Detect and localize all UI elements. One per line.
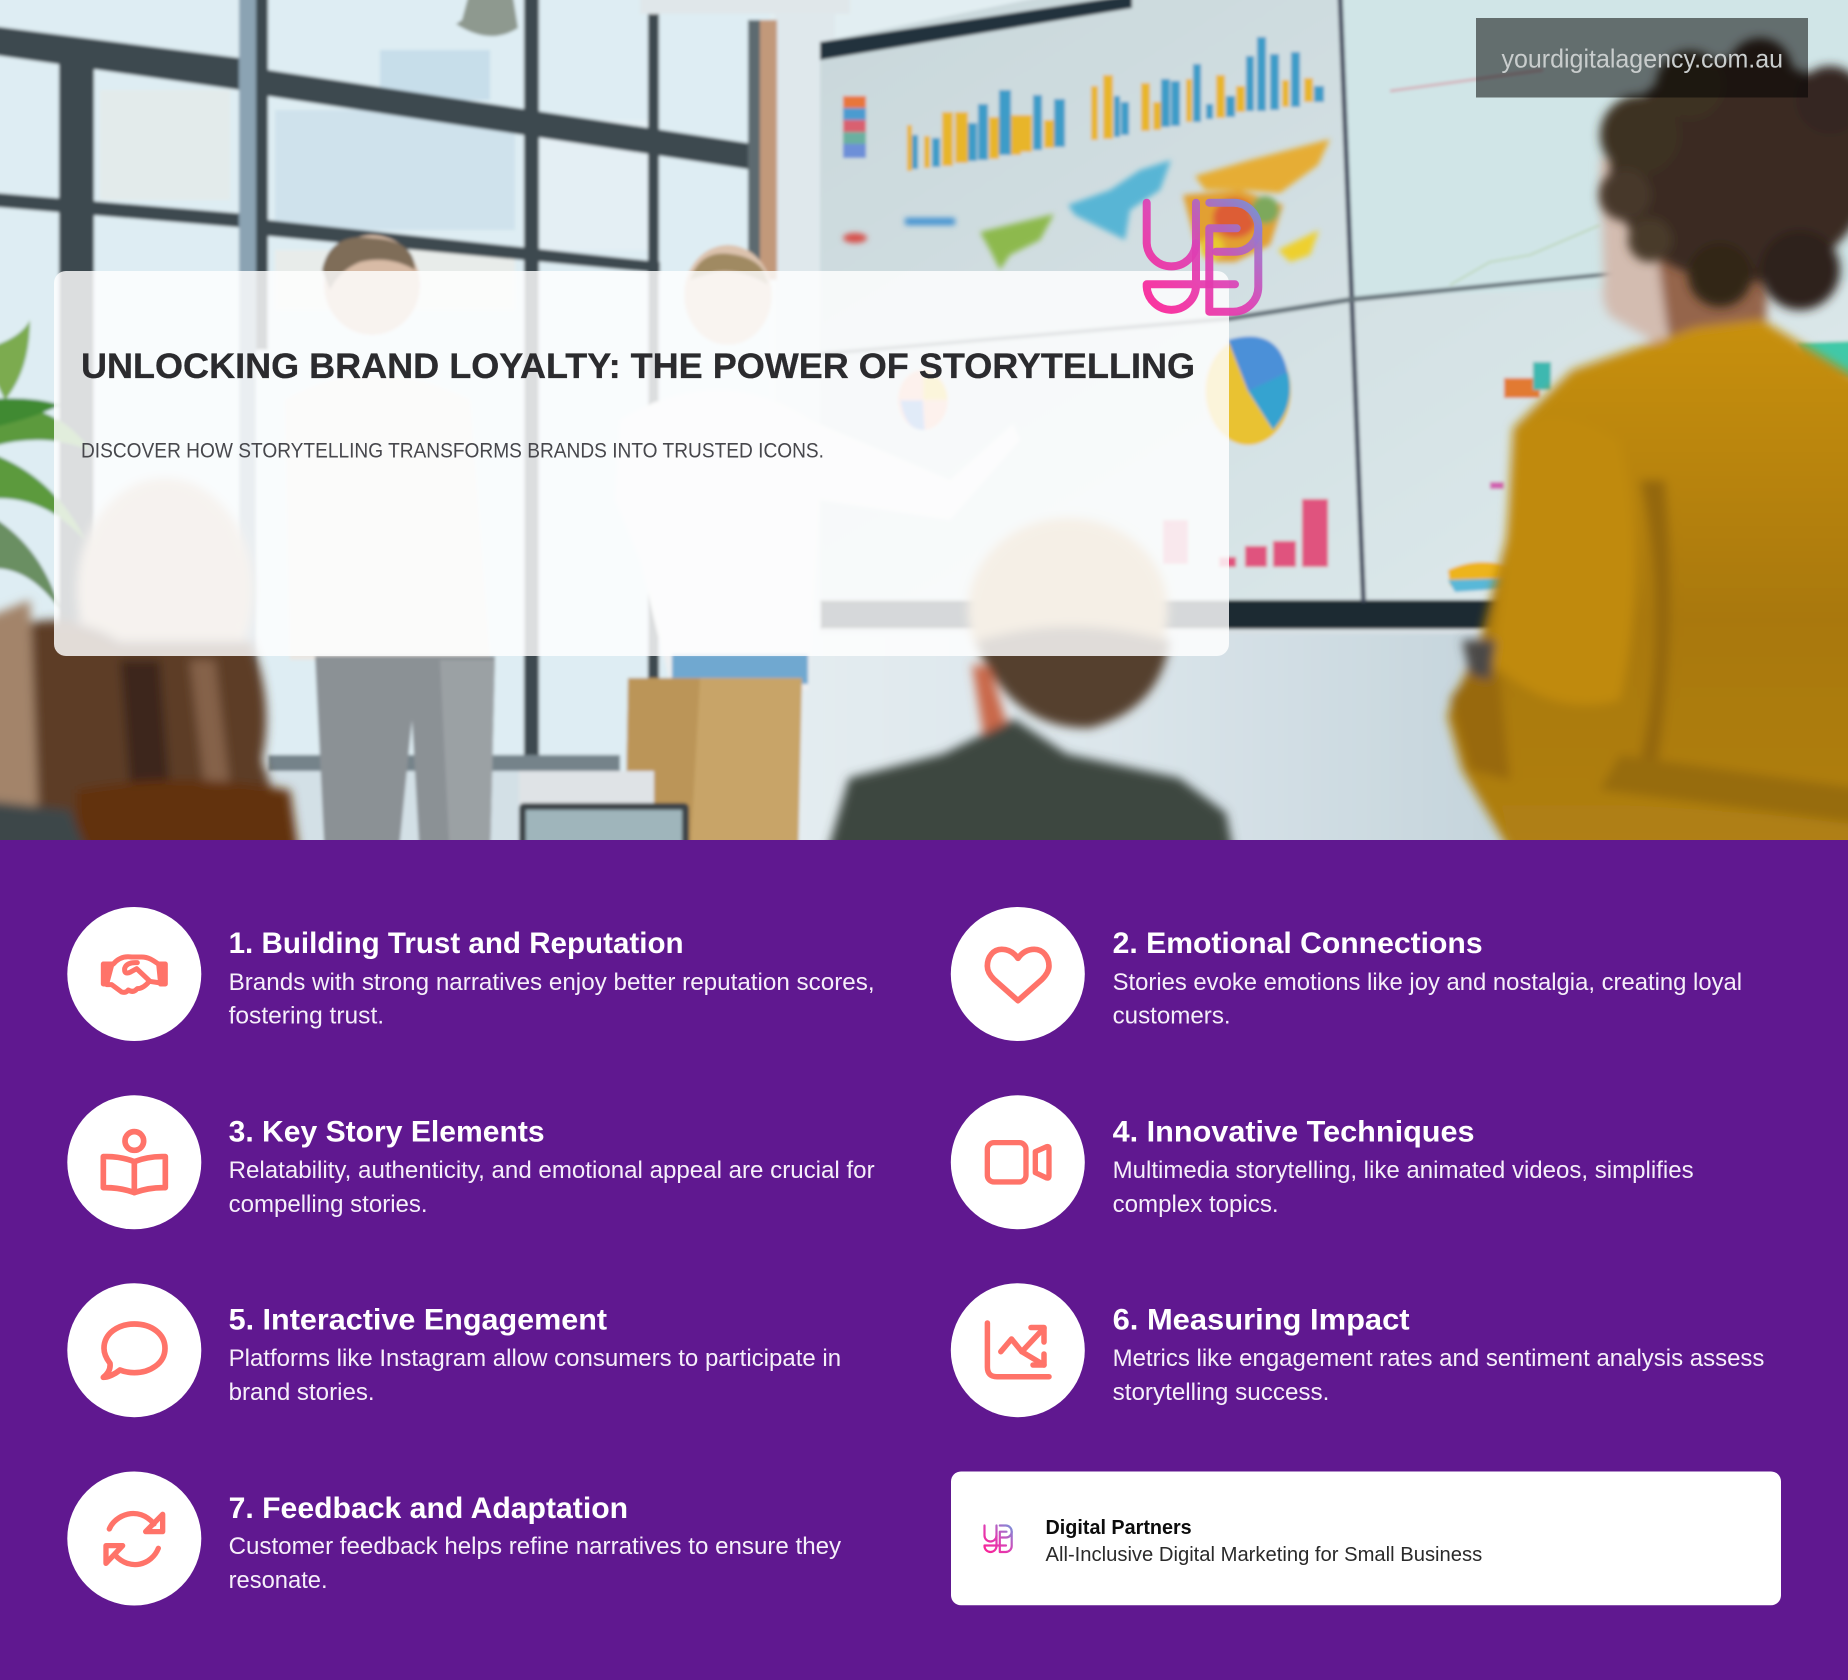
heading: 1. Building Trust and Reputation [229, 927, 684, 960]
item 1: building trust [67, 907, 875, 1041]
icon: small logo [984, 1526, 1012, 1552]
plant [0, 320, 90, 610]
heading: 5. Interactive Engagement [229, 1304, 607, 1336]
website url: yourdigitalagency.com.au [1502, 44, 1783, 74]
pink bar chart [1163, 499, 1328, 567]
description [1113, 1345, 1764, 1406]
screen wall [820, 0, 1848, 629]
foreground audience: blurred people [0, 140, 1848, 860]
icon: speech bubble [67, 1283, 201, 1417]
heading: 3. Key Story Elements [229, 1116, 545, 1148]
description: Brands with strong narratives enjoy better reputation scores, [229, 969, 875, 996]
colored legend strip [843, 96, 866, 158]
description: storytelling success. [1113, 1379, 1329, 1406]
description: complex topics. [1113, 1191, 1279, 1218]
subtitle: DISCOVER HOW STORYTELLING TRANSFORMS BRANDS INTO TRUSTED ICONS. [81, 438, 824, 462]
brand tagline: All-Inclusive Digital Marketing for Small Business [1046, 1543, 1482, 1566]
ceiling lamp [456, 0, 518, 36]
presenter two [624, 244, 810, 840]
icon: reader with book [67, 1095, 201, 1229]
heading: 7. Feedback and Adaptation [229, 1492, 628, 1525]
window frames [0, 0, 760, 780]
world map on screen [843, 139, 1330, 270]
description: resonate. [229, 1567, 328, 1594]
purple background panel [0, 840, 1848, 1680]
screen details right [1504, 378, 1540, 398]
bar charts on screen [907, 75, 1313, 171]
item 2: emotional connections [951, 907, 1742, 1041]
description: customers. [1113, 1002, 1231, 1030]
description [229, 1345, 841, 1406]
item 7: feedback and adaptation [67, 1472, 842, 1606]
description: Multimedia storytelling, like animated videos, simplifies [1113, 1157, 1694, 1184]
description [229, 969, 875, 1030]
title: UNLOCKING BRAND LOYALTY: THE POWER OF STORYTELLING [81, 347, 1195, 386]
translucent title card [54, 271, 1229, 656]
icon: video camera [951, 1095, 1085, 1229]
icon: handshake [67, 907, 201, 1041]
presenter one [285, 235, 495, 860]
description: compelling stories. [229, 1191, 428, 1218]
heading: 4. Innovative Techniques [1113, 1116, 1475, 1148]
laptop [519, 771, 654, 811]
item 4: innovative techniques [951, 1095, 1694, 1229]
logo large [1147, 203, 1258, 312]
item 5: interactive engagement [67, 1283, 841, 1417]
item 3: key story elements [67, 1095, 875, 1229]
pie charts [1205, 337, 1291, 445]
website tag [1476, 18, 1808, 98]
icon: chart with arrows [951, 1283, 1085, 1417]
description [229, 1157, 875, 1218]
description [229, 1533, 842, 1594]
footer card: digital partners [951, 1472, 1781, 1605]
description: Metrics like engagement rates and sentiment analysis assess [1113, 1345, 1764, 1372]
icon: heart [951, 907, 1085, 1041]
description: Relatability, authenticity, and emotional appeal are crucial for [229, 1157, 875, 1184]
description [1113, 1157, 1694, 1218]
description: Stories evoke emotions like joy and nostalgia, creating loyal [1113, 969, 1742, 996]
icon: refresh arrows [67, 1472, 201, 1606]
description: Platforms like Instagram allow consumers to participate in [229, 1345, 841, 1372]
heading: 2. Emotional Connections [1113, 927, 1483, 960]
description [1113, 969, 1742, 1030]
description: brand stories. [229, 1379, 375, 1406]
item 6: measuring impact [951, 1283, 1764, 1417]
centre audience member [968, 518, 1168, 702]
woman with curly hair [1600, 140, 1680, 345]
heading: 6. Measuring Impact [1113, 1304, 1410, 1336]
hero photo: presentation in an office [0, 0, 1848, 880]
brand name: Digital Partners [1046, 1516, 1192, 1539]
description: fostering trust. [229, 1002, 384, 1030]
description: Customer feedback helps refine narratives to ensure they [229, 1533, 842, 1560]
